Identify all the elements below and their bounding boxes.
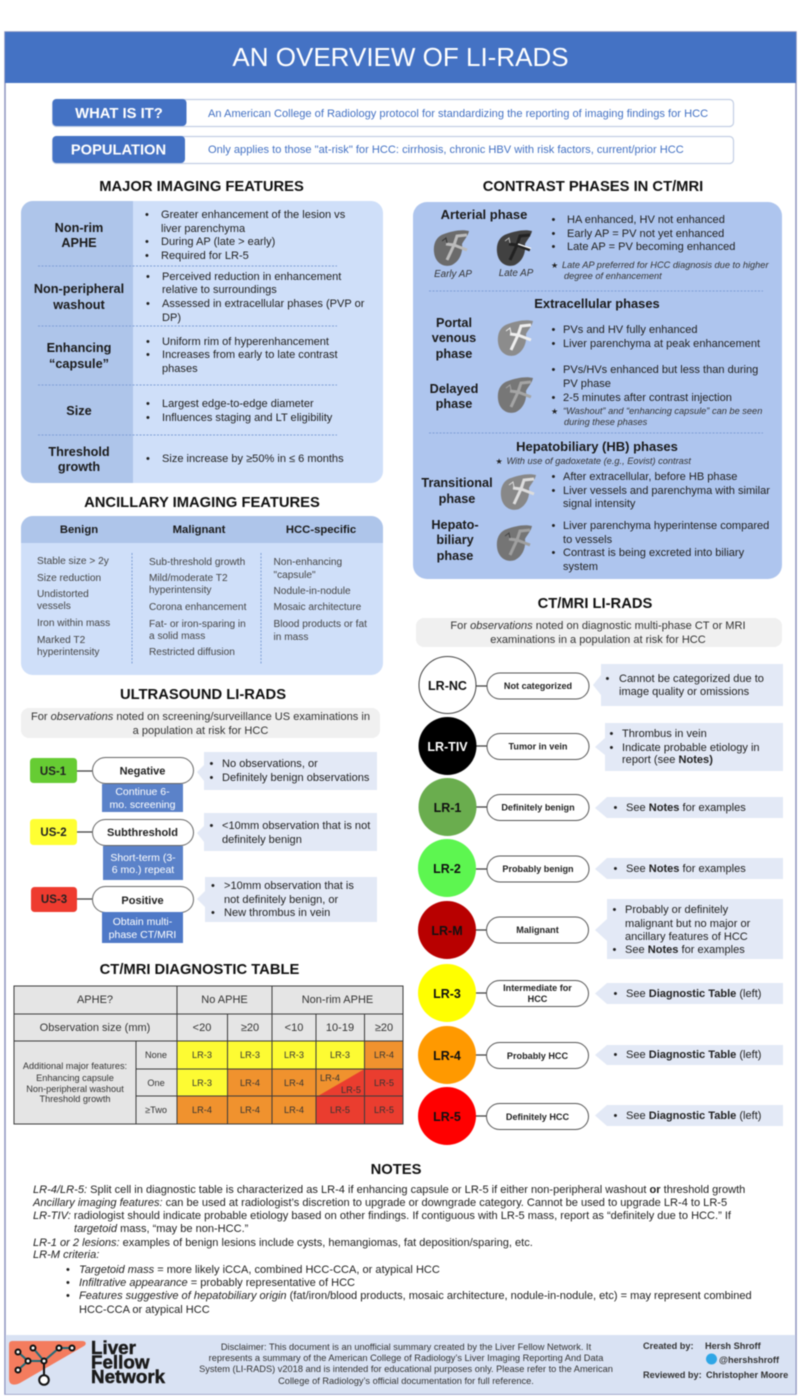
category row: LR-M: Probably or definitely	[625, 904, 729, 916]
hepatobiliary phases section: signal intensity	[563, 498, 636, 510]
category row: LR-TIV: •	[610, 742, 614, 754]
panel: major imaging features	[21, 201, 383, 483]
category row: LR-3: LR-3	[433, 987, 461, 1001]
category row: LR-1: See Notes for examples	[626, 802, 746, 814]
disclaimer: represents a summary of the American College of Radiology’s Liver Imaging Reporting And Data	[209, 1353, 604, 1363]
column: malignant: hyperintensity	[149, 585, 212, 596]
CT/MRI diagnostic table: Non-peripheral washout	[26, 1084, 124, 1094]
category row: LR-5	[418, 1087, 783, 1145]
category row: LR-1	[418, 778, 783, 836]
CT/MRI diagnostic table: LR-4	[192, 1105, 212, 1115]
hepatobiliary phases section: Transitional	[421, 476, 493, 490]
disclaimer: College of Radiology’s official documentation for full reference.	[278, 1376, 534, 1386]
credits: Christopher Moore	[706, 1370, 788, 1380]
category row: LR-M: •	[612, 944, 616, 956]
category row: LR-1: LR-1	[434, 801, 461, 815]
feature: non-rim APHE: APHE	[61, 236, 97, 250]
ultrasound population note: a population at risk for HCC	[133, 725, 268, 737]
CT/MRI diagnostic table: 10-19	[326, 1022, 354, 1034]
column: malignant: Restricted diffusion	[149, 647, 235, 658]
category row: LR-NC: •	[606, 673, 610, 685]
CT/MRI diagnostic table: LR-3	[192, 1050, 212, 1060]
CT/MRI population note: examinations in a population at risk for HCC	[490, 634, 706, 646]
notes text block: LR-1 or 2 lesions: examples of benign lesions include cysts, hemangiomas, fat deposition/sparing, etc.	[33, 1237, 533, 1249]
definition bar: what is it	[52, 99, 734, 126]
ultrasound row: US-3	[31, 877, 377, 943]
CT/MRI diagnostic table: Threshold growth	[40, 1094, 110, 1104]
category row: LR-M: malignant but no major or	[625, 918, 751, 930]
notes text block: •	[66, 1264, 70, 1276]
category row: LR-5: •	[614, 1110, 618, 1122]
feature: non-rim APHE	[55, 209, 346, 262]
category row: LR-4	[418, 1026, 783, 1084]
extracellular phases section: venous	[432, 331, 476, 345]
feature: enhancing capsule: •	[146, 349, 150, 361]
feature: threshold growth: growth	[58, 460, 100, 474]
hepatobiliary phases section: Liver parenchyma hyperintense compared	[563, 520, 769, 532]
CT/MRI diagnostic table: LR-4	[374, 1050, 394, 1060]
feature: non-peripheral washout: relative to surroundings	[162, 284, 277, 296]
CT/MRI diagnostic table: Enhancing capsule	[36, 1073, 114, 1083]
CT/MRI diagnostic table: LR-4	[240, 1105, 260, 1115]
column: malignant: Mild/moderate T2	[149, 573, 228, 584]
category row: LR-3: HCC	[528, 994, 548, 1004]
category row: LR-3: Intermediate for	[503, 983, 572, 993]
arterial phase section: Early AP = PV not yet enhanced	[567, 228, 724, 240]
category row: LR-TIV: report (see Notes)	[622, 754, 713, 766]
CT/MRI diagnostic table: APHE?	[77, 994, 113, 1006]
category row: LR-TIV: Indicate probable etiology in	[622, 742, 760, 754]
category row: LR-3: See Diagnostic Table (left)	[626, 988, 761, 1000]
icon: transitional phase liver	[501, 474, 536, 510]
extracellular phases section: Liver parenchyma at peak enhancement	[563, 338, 760, 350]
feature: non-peripheral washout: Perceived reduction in enhancement	[162, 271, 341, 283]
CT/MRI diagnostic table: LR-4	[320, 1073, 340, 1083]
notes text block: LR-4/LR-5: Split cell in diagnostic table is characterized as LR-4 if enhancing capsule or LR-5 if either non-peripheral washout or threshold growth	[33, 1184, 745, 1196]
ultrasound row: US-3: US-3	[41, 894, 67, 906]
CT/MRI diagnostic table: ≥20	[375, 1022, 393, 1034]
ultrasound row: US-1: mo. screening	[110, 799, 176, 811]
feature: size: Size	[66, 404, 92, 418]
extracellular phases section: •	[552, 338, 556, 350]
feature: non-rim APHE: Non-rim	[55, 221, 103, 235]
ultrasound row: US-3: >10mm observation that is	[224, 880, 354, 892]
arterial phase section: degree of enhancement	[564, 271, 662, 281]
ultrasound row: US-2: US-2	[40, 827, 67, 839]
hepatobiliary phases section: Hepatobiliary (HB) phases	[516, 439, 678, 454]
notes text block: Targetoid mass = more likely iCCA, combined HCC-CCA, or atypical HCC	[79, 1264, 440, 1276]
feature: non-rim APHE: liver parenchyma	[161, 223, 246, 235]
credits: Hersh Shroff	[705, 1341, 762, 1351]
feature: size	[66, 398, 333, 424]
category row: LR-NC: Cannot be categorized due to	[619, 673, 764, 685]
definition bar: what is it: An American College of Radiology protocol for standardizing the reporting of imaging findings for HCC	[208, 108, 708, 120]
ultrasound row: US-1: Negative	[120, 766, 165, 778]
CT/MRI diagnostic table: LR-5	[341, 1085, 361, 1095]
CT/MRI diagnostic table: <20	[193, 1022, 211, 1034]
ultrasound row: US-2: <10mm observation that is not	[222, 820, 370, 832]
column: benign: Marked T2	[37, 635, 86, 646]
feature: non-rim APHE: •	[145, 236, 149, 248]
feature: non-peripheral washout: Non-peripheral	[34, 282, 124, 296]
extracellular phases section: Extracellular phases	[534, 296, 660, 311]
heading: ancillary imaging features: ANCILLARY IMAGING FEATURES	[84, 495, 320, 511]
feature: enhancing capsule: “capsule”	[49, 357, 109, 371]
column: benign	[37, 524, 110, 658]
ultrasound row: US-3: Obtain multi-	[113, 916, 173, 928]
hepatobiliary phases section: •	[552, 520, 556, 532]
ultrasound row: US-1: •	[210, 758, 214, 770]
CT/MRI diagnostic table: LR-3	[240, 1050, 260, 1060]
arterial phase section: Early AP	[434, 269, 472, 280]
CT/MRI diagnostic table: None	[145, 1050, 167, 1060]
category row: LR-4: See Diagnostic Table (left)	[626, 1049, 761, 1061]
arterial phase section: Late AP = PV becoming enhanced	[567, 241, 735, 253]
arterial phase section	[434, 207, 769, 281]
feature: enhancing capsule: Enhancing	[47, 341, 111, 355]
column: benign: Size reduction	[37, 573, 101, 584]
feature: size: Largest edge-to-edge diameter	[162, 398, 314, 410]
feature: enhancing capsule: phases	[162, 363, 198, 375]
extracellular phases section: •	[552, 392, 556, 404]
arterial phase section: Late AP	[499, 268, 534, 279]
hepatobiliary phases section: With use of gadoxetate (e.g., Eovist) contrast	[506, 456, 691, 466]
notes text block: LR-M criteria:	[33, 1249, 99, 1261]
category row: LR-4: Probably HCC	[507, 1051, 569, 1061]
ultrasound row: US-1: Definitely benign observations	[222, 772, 370, 784]
CT/MRI diagnostic table: Observation size (mm)	[40, 1022, 150, 1034]
arterial phase section: •	[552, 214, 556, 226]
feature: enhancing capsule: Uniform rim of hyperenhancement	[162, 336, 329, 348]
credits: @hershshroff	[719, 1355, 780, 1365]
hepatobiliary phases section: •	[552, 471, 556, 483]
feature: threshold growth: Size increase by ≥50% in ≤ 6 months	[162, 453, 344, 465]
category row: LR-1: •	[614, 802, 618, 814]
category row: LR-M: •	[612, 904, 616, 916]
category row: LR-TIV: •	[610, 728, 614, 740]
hepatobiliary phases section: to vessels	[563, 534, 613, 546]
extracellular phases section: ★	[551, 407, 558, 416]
column: malignant: Malignant	[173, 524, 226, 536]
column: malignant: Fat- or iron-sparing in	[149, 619, 246, 630]
ultrasound row: US-3: New thrombus in vein	[224, 907, 330, 919]
heading: ultrasound LI-RADS: ULTRASOUND LI-RADS	[120, 687, 286, 703]
hepatobiliary phases section: system	[563, 561, 598, 573]
category row: LR-5: See Diagnostic Table (left)	[626, 1110, 761, 1122]
feature: enhancing capsule: •	[146, 336, 150, 348]
credits: Reviewed by:	[643, 1370, 702, 1380]
heading: CT/MRI LI-RADS: CT/MRI LI-RADS	[538, 596, 653, 612]
category row: LR-TIV: Thrombus in vein	[622, 728, 707, 740]
CT/MRI diagnostic table: LR-4	[284, 1078, 304, 1088]
category row: LR-2: Probably benign	[502, 864, 574, 874]
category row: LR-4: LR-4	[433, 1049, 461, 1063]
hepatobiliary phases section: •	[552, 547, 556, 559]
icon: early AP liver	[434, 230, 469, 266]
arterial phase section: Arterial phase	[441, 207, 527, 222]
category row: LR-M: Malignant	[516, 925, 559, 935]
extracellular phases section: 2-5 minutes after contrast injection	[563, 392, 732, 404]
column: HCC-specific: Non-enhancing	[274, 557, 342, 568]
extracellular phases section: Portal	[436, 316, 472, 330]
disclaimer	[199, 1342, 613, 1386]
ultrasound row: US-2: Subthreshold	[107, 827, 178, 839]
credits	[643, 1341, 788, 1380]
CT/MRI population note: For observations noted on diagnostic multi-phase CT or MRI	[450, 620, 746, 632]
feature: non-peripheral washout	[34, 271, 365, 324]
column: HCC-specific: "capsule"	[274, 570, 316, 581]
extracellular phases section: PV phase	[563, 378, 611, 390]
definition bar: population	[52, 136, 734, 164]
category row: LR-M: See Notes for examples	[625, 944, 745, 956]
hepatobiliary phases section	[421, 439, 770, 573]
definition bar: population: Only applies to those "at-risk" for HCC: cirrhosis, chronic HBV with risk factors, current/prior HCC	[208, 144, 684, 156]
definition bar: what is it: WHAT IS IT?	[75, 106, 163, 122]
feature: threshold growth: •	[146, 453, 150, 465]
disclaimer: System (LI-RADS) v2018 and is intended for educational purposes only. Please refer to the American	[199, 1364, 613, 1374]
notes text block: HCC-CCA or atypical HCC	[79, 1304, 210, 1316]
column: malignant: a solid mass	[149, 631, 205, 642]
arterial phase section: ★	[551, 261, 558, 270]
ultrasound row: US-2: Short-term (3-	[110, 852, 176, 864]
feature: non-peripheral washout: Assessed in extracellular phases (PVP or	[162, 298, 365, 310]
CT/MRI diagnostic table: LR-5	[374, 1078, 394, 1088]
CT/MRI diagnostic table: ≥20	[241, 1022, 259, 1034]
category row: LR-2: See Notes for examples	[626, 863, 746, 875]
column: benign: Iron within mass	[37, 618, 110, 629]
CT/MRI diagnostic table: <10	[285, 1022, 303, 1034]
credits: Created by:	[643, 1341, 694, 1351]
ultrasound row: US-1: •	[210, 772, 214, 784]
column: malignant	[149, 524, 247, 658]
column: HCC-specific: Nodule-in-nodule	[274, 586, 351, 597]
ultrasound row: US-3: Positive	[121, 895, 164, 907]
notes text block: Infiltrative appearance = probably representative of HCC	[79, 1277, 355, 1289]
category row: LR-3: •	[614, 988, 618, 1000]
category row: LR-TIV: LR-TIV	[427, 740, 468, 754]
hepatobiliary phases section: phase	[439, 492, 475, 506]
column: malignant: Corona enhancement	[149, 602, 247, 613]
hepatobiliary phases section: Liver vessels and parenchyma with similar	[563, 485, 770, 497]
ultrasound row: US-1: No observations, or	[222, 758, 318, 770]
disclaimer: Disclaimer: This document is an unofficial summary created by the Liver Fellow Network. It	[221, 1342, 592, 1352]
heading: CT/MRI diagnostic table: CT/MRI DIAGNOSTIC TABLE	[100, 962, 299, 978]
CT/MRI diagnostic table: LR-5	[374, 1105, 394, 1115]
column: HCC-specific: Blood products or fat	[274, 619, 367, 630]
column: HCC-specific: Mosaic architecture	[274, 602, 362, 613]
category row: LR-NC: image quality or omissions	[619, 686, 750, 698]
ultrasound population note: For observations noted on screening/surveillance US examinations in	[31, 711, 370, 723]
extracellular phases section: •	[552, 324, 556, 336]
CT/MRI diagnostic table: One	[147, 1078, 165, 1088]
hepatobiliary phases section: biliary	[436, 533, 474, 547]
feature: non-peripheral washout: •	[146, 271, 150, 283]
hepatobiliary phases section: phase	[437, 549, 473, 563]
category row: LR-2: LR-2	[433, 862, 461, 876]
arterial phase section: Late AP preferred for HCC diagnosis due to higher	[562, 260, 769, 270]
column: benign: hyperintensity	[37, 647, 100, 658]
hepatobiliary phases section: Hepato-	[431, 518, 479, 532]
category row: LR-4: •	[614, 1049, 618, 1061]
hepatobiliary phases section: ★	[496, 457, 503, 466]
feature: non-peripheral washout: DP)	[162, 312, 181, 324]
notes text block	[32, 1184, 752, 1316]
arterial phase section: •	[552, 228, 556, 240]
logo: Liver Fellow Network	[9, 1337, 166, 1387]
category row: LR-NC: Not categorized	[504, 681, 572, 691]
category row: LR-5: LR-5	[433, 1110, 461, 1124]
hepatobiliary phases section: •	[552, 485, 556, 497]
icon: delayed phase liver	[498, 377, 533, 413]
extracellular phases section: phase	[436, 347, 472, 361]
extracellular phases section	[430, 296, 762, 427]
column: malignant: Sub-threshold growth	[149, 557, 245, 568]
feature: non-rim APHE: •	[145, 250, 149, 262]
hepatobiliary phases section: Contrast is being excreted into biliary	[563, 547, 745, 559]
icon: hepatobiliary phase liver	[497, 525, 532, 561]
column: benign: Benign	[60, 524, 98, 536]
CT/MRI diagnostic table	[14, 986, 403, 1124]
category row: LR-1: Definitely benign	[501, 802, 575, 812]
notes text block: Features suggestive of hepatobiliary origin (fat/iron/blood products, mosaic architecture, nodule-in-nodule, etc) = may represent combined	[79, 1290, 752, 1302]
definition bar: population: POPULATION	[71, 142, 166, 158]
feature: threshold growth	[48, 445, 344, 474]
category row: LR-2: •	[614, 863, 618, 875]
feature: non-peripheral washout: washout	[52, 298, 105, 312]
CT/MRI diagnostic table: ≥Two	[145, 1105, 167, 1115]
logo: Liver Fellow Network: Fellow	[91, 1352, 150, 1372]
ultrasound row: US-3: •	[211, 907, 215, 919]
icon: late AP liver	[497, 230, 532, 266]
category row: LR-M	[418, 899, 783, 959]
ultrasound row: US-3: not definitely benign, or	[224, 894, 339, 906]
column: HCC-specific	[274, 524, 367, 643]
logo: Liver Fellow Network: Network	[91, 1366, 166, 1387]
panel: ancillary imaging features	[21, 516, 383, 675]
extracellular phases section: during these phases	[564, 417, 648, 427]
ultrasound row: US-1: Continue 6-	[115, 786, 170, 798]
feature: enhancing capsule: Increases from early to late contrast	[162, 349, 338, 361]
category row: LR-5: Definitely HCC	[506, 1112, 570, 1122]
feature: size: Influences staging and LT eligibility	[162, 412, 333, 424]
column: benign: Stable size > 2y	[37, 556, 110, 567]
feature: threshold growth: Threshold	[48, 445, 110, 459]
column: benign: Undistorted	[37, 589, 89, 600]
CT/MRI diagnostic table: LR-4	[240, 1078, 260, 1088]
category row: LR-2	[418, 839, 783, 897]
feature: non-rim APHE: Greater enhancement of the lesion vs	[161, 209, 346, 221]
feature: non-rim APHE: During AP (late > early)	[161, 236, 275, 248]
icon: portal venous liver	[498, 320, 533, 356]
CT/MRI diagnostic table: No APHE	[201, 994, 248, 1006]
CT/MRI diagnostic table: LR-3	[330, 1050, 350, 1060]
CT/MRI diagnostic table: Additional major features:	[23, 1061, 127, 1071]
hepatobiliary phases section: After extracellular, before HB phase	[563, 471, 737, 483]
CT/MRI diagnostic table: LR-4	[284, 1105, 304, 1115]
ultrasound row: US-2: definitely benign	[222, 834, 302, 846]
ultrasound row: US-1: US-1	[40, 766, 67, 778]
footer	[6, 1335, 796, 1394]
feature: non-rim APHE: •	[145, 209, 149, 221]
ultrasound row: US-3: •	[211, 880, 215, 892]
CT/MRI diagnostic table: Non-rim APHE	[302, 994, 373, 1006]
notes text block: LR-TIV: radiologist should indicate probable etiology based on other findings. If contiguous with LR-5 mass, report as “definitely due to HCC.” If	[33, 1210, 732, 1222]
category row: LR-3	[418, 964, 783, 1022]
ultrasound row: US-2: 6 mo.) repeat	[112, 864, 174, 876]
column: HCC-specific: HCC-specific	[286, 524, 356, 536]
category row: LR-NC	[419, 656, 783, 714]
feature: non-rim APHE: Required for LR-5	[161, 250, 249, 262]
extracellular phases section: PVs and HV fully enhanced	[563, 324, 698, 336]
feature: size: •	[146, 398, 150, 410]
arterial phase section: HA enhanced, HV not enhanced	[567, 214, 725, 226]
ultrasound row: US-2: •	[210, 820, 214, 832]
category row: LR-NC: LR-NC	[428, 679, 467, 693]
feature: enhancing capsule	[47, 336, 338, 375]
category row: LR-M: LR-M	[431, 924, 463, 938]
category row: LR-TIV: Tumor in vein	[509, 742, 567, 752]
title banner: AN OVERVIEW OF LI-RADS	[232, 42, 569, 72]
ultrasound population note	[21, 708, 380, 738]
notes text block: targetoid mass, “may be non-HCC.”	[74, 1223, 249, 1235]
panel: contrast phases	[413, 202, 782, 579]
notes text block: •	[66, 1290, 70, 1302]
extracellular phases section: PVs/HVs enhanced but less than during	[563, 364, 758, 376]
feature: size: •	[146, 412, 150, 424]
CT/MRI diagnostic table: LR-3	[192, 1078, 212, 1088]
ultrasound row: US-2	[30, 813, 377, 880]
heading: notes: NOTES	[371, 1162, 422, 1178]
extracellular phases section: phase	[436, 397, 472, 411]
notes text block: •	[66, 1277, 70, 1289]
column: benign: vessels	[37, 601, 71, 612]
extracellular phases section: •	[552, 364, 556, 376]
CT/MRI population note	[416, 618, 782, 647]
notes text block: Ancillary imaging features: can be used at radiologist’s discretion to upgrade or downgrade category. Cannot be used to upgrade LR-4 to LR-5	[32, 1197, 727, 1209]
extracellular phases section: “Washout” and “enhancing capsule” can be seen	[563, 406, 762, 416]
arterial phase section: •	[552, 241, 556, 253]
feature: non-peripheral washout: •	[146, 298, 150, 310]
CT/MRI diagnostic table: LR-5	[330, 1105, 350, 1115]
extracellular phases section: Delayed	[430, 382, 478, 396]
CT/MRI diagnostic table: LR-3	[284, 1050, 304, 1060]
heading: contrast phases: CONTRAST PHASES IN CT/MRI	[483, 179, 703, 195]
ultrasound row: US-1	[30, 752, 377, 812]
heading: major imaging features: MAJOR IMAGING FEATURES	[99, 179, 304, 195]
ultrasound row: US-3: phase CT/MRI	[109, 929, 176, 941]
category row: LR-TIV	[418, 717, 783, 775]
title banner	[5, 32, 796, 83]
logo: Liver Fellow Network: Liver	[91, 1337, 137, 1358]
category row: LR-M: ancillary features of HCC	[625, 931, 748, 943]
column: HCC-specific: in mass	[274, 632, 308, 643]
